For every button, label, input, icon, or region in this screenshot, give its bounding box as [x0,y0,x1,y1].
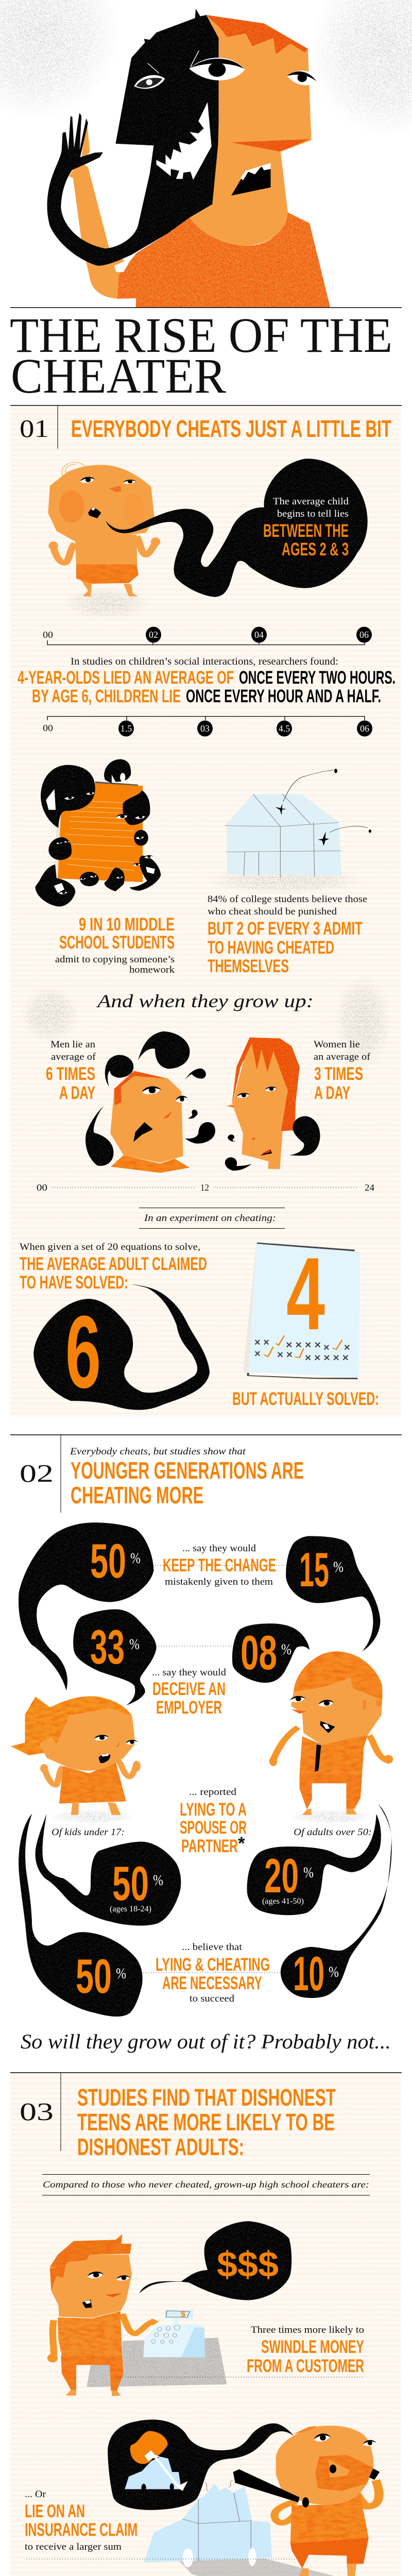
text: men lie: average of [51,1052,96,1062]
chart: hours in a day dotted axis [37,1182,374,1193]
text: insurance claim: LIE ON AN [25,2501,85,2521]
subheading: compared to those who never cheated: Compared to those who never cheated, grown-up high school cheaters are: [43,2179,369,2190]
text: lying to spouse: ... reported [189,1787,237,1798]
chart: timeline lies per hours, upper: 04 [254,630,264,640]
illustration: two-faced cheater hero [0,0,412,308]
text: lying and cheating necessary: to succeed [190,1993,235,2004]
text: middle school homework: 9 IN 10 MIDDLE [79,914,175,935]
speech bubbles: kids and adults percentages shapes [19,1522,380,1705]
panel: section 1 background [10,405,401,1417]
bubble numbers: deceive employer 33 and 08: % [129,1636,140,1653]
text: lying and cheating necessary: ARE NECESSARY [162,1973,262,1993]
bubble text: ages 2 and 3: AGES 2 & 3 [282,539,349,560]
panel: section 3 background [10,2073,401,2576]
notebook: actually solved 4: × [344,1342,350,1353]
heading: will they grow out of it: So will they grow out of it? Probably not... [21,2030,391,2053]
text: keep the change: mistakenly given to them [165,1577,273,1587]
text: insurance claim: ... Or [25,2489,46,2500]
bubble numbers: keep the change 50 and 15: 15 [299,1543,329,1597]
text block: children's lying frequency: BY AGE 6, CHILDREN LIE [32,686,181,706]
text: college students: 84% of college students believe those [208,894,367,905]
bubble numbers: deceive employer 33 and 08 [90,1620,291,1680]
bubble numbers: deceive employer 33 and 08: 08 [241,1625,277,1680]
notebook: actually solved 4: 4 [286,1236,325,1351]
text: middle school homework: SCHOOL STUDENTS [59,933,175,953]
notebook: actually solved 4: × [254,1348,261,1360]
bubble numbers: spouse 50 and 20: (ages 18-24) [110,1905,151,1913]
divider lines around title [10,308,402,405]
text: insurance claim [25,2489,297,2559]
speech bubble: average child [106,459,368,597]
bubble numbers: deceive employer 33 and 08: % [281,1641,291,1658]
bubble numbers: spouse 50 and 20: (ages 41-50) [262,1897,304,1906]
text block: children's lying frequency [18,656,396,706]
chart: timeline lies per hours, lower: 06 [360,723,369,734]
bubble numbers: spouse 50 and 20: 50 [112,1856,149,1910]
bubble text: ages 2 and 3: BETWEEN THE [263,521,349,541]
bubble text: ages 2 and 3: begins to tell lies [277,509,349,519]
illustration: girl [10,1696,141,1824]
text: women lie: an average of [314,1052,371,1062]
title: THE RISE OF THE [10,308,392,363]
illustration: man with speech tails [85,1031,215,1173]
illustration: glass house with stones [205,769,371,894]
text: lying to spouse: * [238,1834,245,1854]
text: lying and cheating necessary: LYING & CHEATING [156,1955,270,1975]
text: insurance claim: to receive a larger sum [25,2541,122,2552]
text: middle school homework [55,914,175,975]
illustration: man at cash register [47,2255,227,2396]
bubble text: ages 2 and 3 [263,496,349,560]
bubble numbers: keep the change 50 and 15: % [130,1550,141,1567]
subheading: compared to those who never cheated [42,2174,370,2195]
illustration: boy with tie [269,1651,393,1824]
chart: timeline lies per hours, lower [43,716,372,737]
text: college students: THEMSELVES [208,956,289,976]
text: swindle money: SWINDLE MONEY [261,2337,364,2357]
text: men lie: Men lie an [50,1039,96,1050]
section 3 heading [10,2073,402,2160]
text: lying to spouse: SPOUSE OR [180,1818,247,1838]
section 2 heading: 02 [20,1459,54,1487]
notebook: actually solved 4: × × [254,1337,269,1348]
hair of man at register [50,2234,131,2267]
bubble numbers: keep the change 50 and 15 [90,1534,344,1597]
section 2 heading: Everybody cheats, but studies show that [70,1446,246,1457]
text: women lie [314,1039,371,1103]
text: women lie: Women lie [314,1039,360,1050]
chart: hours in a day dotted axis: 00 [37,1182,47,1193]
section 1 heading [20,405,391,449]
text: deceive an employer: DECEIVE AN [152,1679,226,1699]
text: lying and cheating necessary: ... believe that [182,1942,243,1953]
notebook: actually solved 4: × × × × × [305,1352,349,1364]
text: average adult claimed: When given a set of 20 equations to solve, [20,1242,200,1252]
text: swindle money [117,2325,364,2377]
text: lying and cheating necessary [156,1942,270,2004]
subheading: experiment on cheating: In an experiment on cheating: [144,1213,276,1224]
text: college students: TO HAVING CHEATED [208,938,334,958]
section 3 heading: DISHONEST ADULTS: [77,2133,244,2160]
text: keep the change: KEEP THE CHANGE [163,1555,276,1575]
title: CHEATER [11,348,226,403]
chart: hours in a day dotted axis: 24 [365,1182,374,1193]
chart: timeline lies per hours, upper: 06 [359,630,369,640]
text: men lie: 6 TIMES [46,1064,95,1084]
section 1 heading: 01 [20,414,49,443]
notebook: actually solved 4: × × × × [286,1340,321,1351]
text: deceive an employer: EMPLOYER [156,1698,222,1718]
notebook: actually solved 4 [232,1236,379,1409]
illustration: baby telling a lie [48,459,368,619]
bubble numbers: keep the change 50 and 15: % [333,1558,344,1575]
chart: hours in a day dotted axis: 12 [200,1182,209,1193]
illustration: creatures around homework [36,759,161,907]
text: college students: who cheat should be punished [208,906,337,917]
text: lying to spouse: PARTNER [181,1836,238,1856]
heading: and when they grow up: And when they grow up: [96,991,314,1011]
bubble numbers: necessary 50 and 10: 50 [76,1949,112,2003]
notebook: actually solved 4: × [323,1342,330,1353]
bubble numbers: necessary 50 and 10: % [116,1965,126,1982]
section 3 heading: 03 [20,2097,54,2126]
labels: kids and adults groups: Of adults over 50: [294,1827,372,1838]
speech bubble: dollars: $$$ [217,2244,279,2284]
speech bubble: claimed 6 [33,1284,210,1410]
chart: timeline lies per hours, upper [43,626,372,645]
bubble numbers: spouse 50 and 20: % [303,1864,314,1881]
text: keep the change [163,1543,276,1587]
chart: timeline lies per hours, lower: 00 [43,723,53,733]
background dust behind adults [21,975,391,1069]
bubble numbers: spouse 50 and 20: % [153,1872,163,1889]
illustration: woman with speech tails [225,1038,320,1171]
speech bubble: claimed 6: 6 [65,1295,101,1410]
bubble numbers: spouse 50 and 20: 20 [264,1849,299,1903]
speech bubbles: lower percentages shapes [19,1804,392,2016]
text block: children's lying frequency: In studies on children’s social interactions, researchers found: [71,656,338,667]
text: women lie: 3 TIMES [314,1064,363,1084]
title [10,308,392,403]
text: swindle money: Three times more likely to [251,2325,364,2335]
text: men lie [46,1039,96,1103]
illustration: man with bat and smashed car [108,2419,380,2576]
text: deceive an employer [152,1667,227,1718]
text: college students [208,894,367,976]
text: average adult claimed: THE AVERAGE ADULT CLAIMED [20,1254,207,1274]
bubble text: ages 2 and 3: The average child [273,496,349,507]
text: women lie: A DAY [314,1083,350,1103]
text block: children's lying frequency: 4-YEAR-OLDS LIED AN AVERAGE OF [18,668,234,688]
section 2 heading: CHEATING MORE [71,1482,203,1509]
bubble numbers: spouse 50 and 20 [110,1849,314,1913]
text: deceive an employer: ... say they would [152,1667,227,1678]
text: insurance claim: INSURANCE CLAIM [25,2520,138,2540]
chart: timeline lies per hours, lower: 1.5 [121,723,132,734]
bubble numbers: necessary 50 and 10: % [329,1963,339,1980]
bubble numbers: necessary 50 and 10: 10 [293,1946,324,2001]
text: average adult claimed: TO HAVE SOLVED: [20,1273,128,1293]
chart: timeline lies per hours, upper: 00 [43,630,53,640]
text: average adult claimed [20,1242,207,1293]
text: keep the change: ... say they would [182,1543,256,1554]
chart: timeline lies per hours, upper: 02 [149,630,158,640]
section 2 heading [10,1435,402,1513]
text: middle school homework: homework [129,964,175,975]
bubble numbers: necessary 50 and 10 [76,1946,339,2003]
register display dollar sign: $ [181,2310,185,2319]
text: lying to spouse: LYING TO A [180,1800,247,1820]
text: men lie: A DAY [59,1083,95,1103]
subheading: experiment on cheating [139,1208,285,1228]
labels: kids and adults groups [52,1827,372,1838]
speech bubble: dollars [139,2221,291,2300]
notebook: actually solved 4: × × [277,1349,293,1361]
dotted connectors [143,1565,285,1973]
bubble numbers: deceive employer 33 and 08: 33 [90,1620,125,1674]
chart: timeline lies per hours, lower: 03 [200,723,210,734]
chart: timeline lies per hours, lower: 4.5 [279,723,290,734]
labels: kids and adults groups: Of kids under 17: [52,1827,125,1838]
bubble numbers: keep the change 50 and 15: 50 [90,1534,126,1588]
text: middle school homework: admit to copying someone’s [55,954,175,965]
text: lying to spouse [180,1787,247,1856]
